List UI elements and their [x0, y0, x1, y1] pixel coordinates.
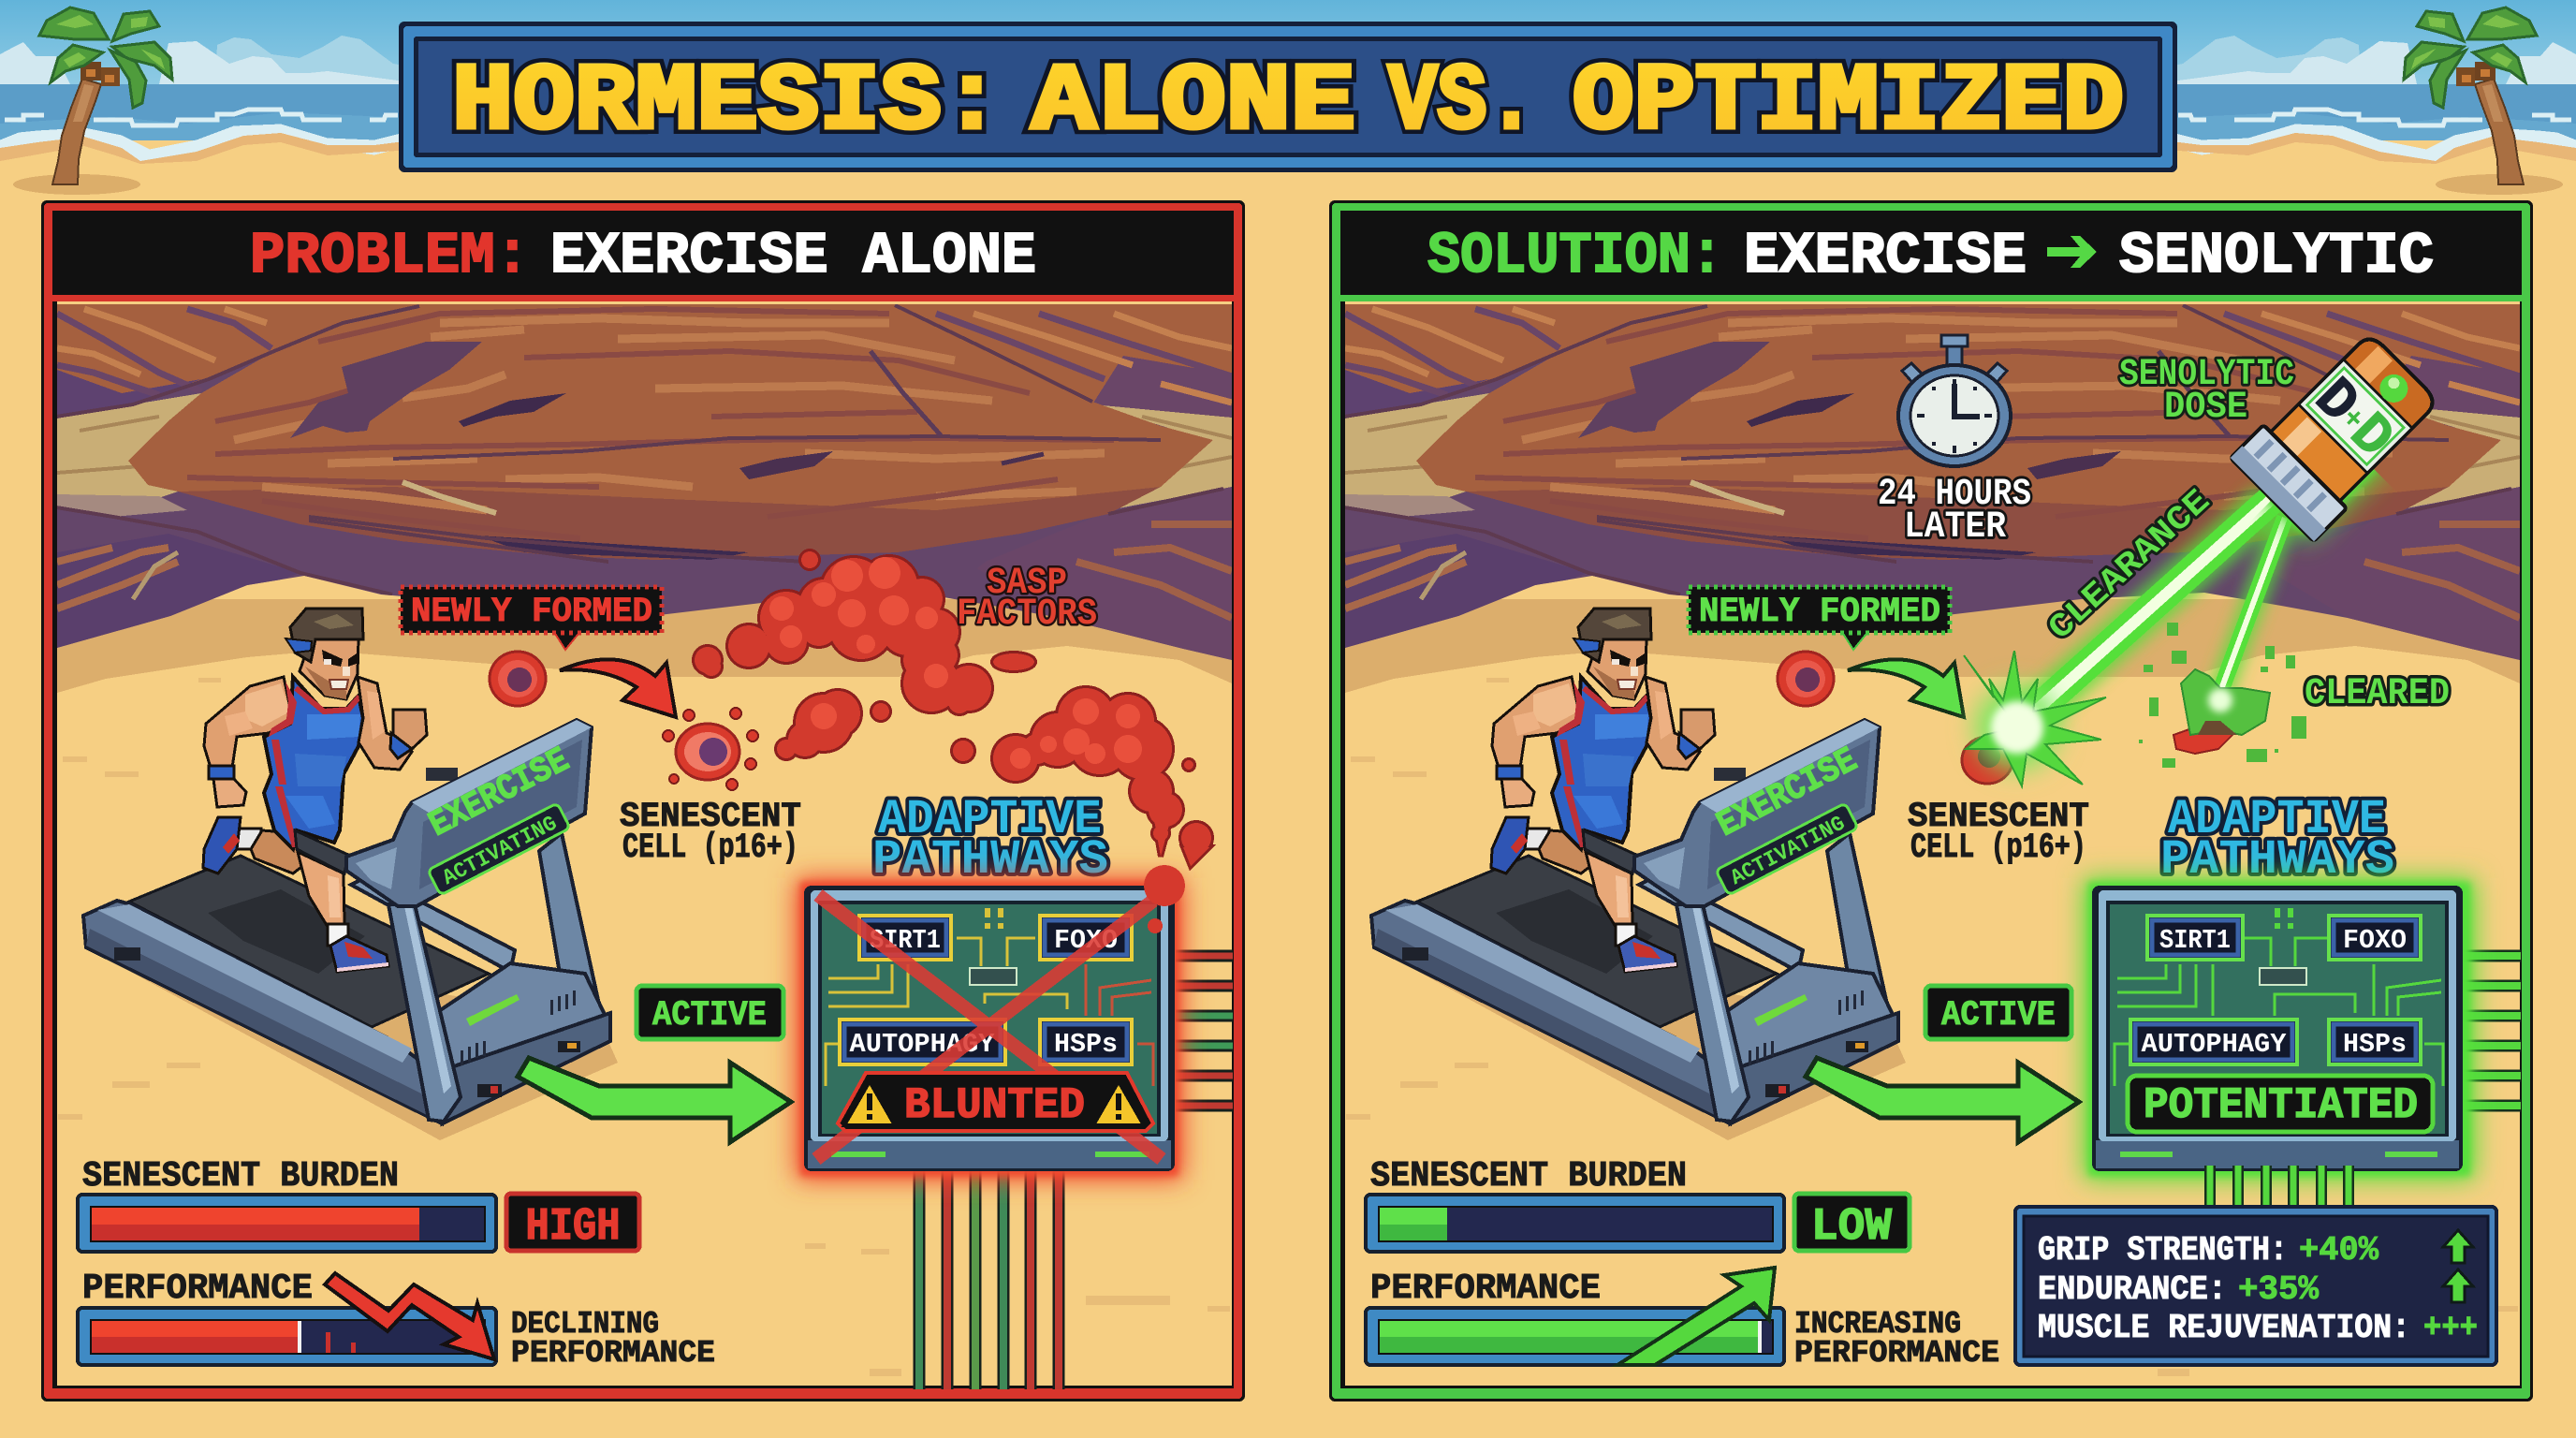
- callout: newly formed: [1689, 587, 1950, 650]
- label: adaptive pathways: [2160, 792, 2394, 888]
- panel frame: [41, 200, 1245, 1401]
- label: clearance: CLEARANCE: [2042, 482, 2217, 648]
- icon: senescent cell: [663, 708, 758, 790]
- pathways chip: blunted: [796, 865, 1185, 1180]
- badge: high: [506, 1194, 639, 1253]
- panel header: EXERCISE: [1744, 223, 2027, 289]
- treadmill console: ACTIVATING: [1726, 811, 1849, 890]
- label: 24 hours later: [1878, 474, 2031, 549]
- treadmill console: EXERCISE: [423, 741, 576, 846]
- title text: OPTIMIZED: [1573, 51, 2124, 156]
- red cross: [816, 895, 1162, 1159]
- pathway: HSPs: HSPs: [2343, 1029, 2407, 1060]
- badge: active: [637, 986, 783, 1039]
- palm tree left: [13, 7, 172, 195]
- pathways chip: potentiated: [2084, 878, 2475, 1210]
- label: adaptive pathways: PATHWAYS: [2160, 832, 2394, 888]
- title text: [452, 51, 2124, 156]
- burst: clearance hit: [1964, 651, 2106, 786]
- callout: newly formed: NEWLY FORMED: [411, 593, 652, 632]
- treadmill console: [1583, 720, 1880, 1122]
- arrow: increasing performance: [1617, 1268, 1775, 1365]
- badge: active: [1925, 986, 2071, 1039]
- title banner: [399, 22, 2177, 172]
- label: declining performance: PERFORMANCE: [511, 1336, 715, 1371]
- pathway: HSPs: HSPs: [1054, 1029, 1118, 1060]
- label: senescent cell: CELL (p16+): [1910, 829, 2086, 868]
- panel header: [1427, 223, 2434, 289]
- label: SASP factors: [957, 563, 1097, 636]
- panel: problem, exercise alone: [41, 200, 1245, 1401]
- pathway: SIRT1: [2147, 916, 2243, 960]
- pathway: SIRT1: SIRT1: [2159, 925, 2231, 956]
- title text: ALONE: [1032, 51, 1355, 156]
- badge: high: HIGH: [526, 1202, 620, 1253]
- pathway: HSPs: [1040, 1020, 1132, 1064]
- arrow: to senescent cell: [1848, 659, 1964, 717]
- arrow: activation to chip: [518, 1058, 791, 1142]
- SASP blob on chip: [1144, 865, 1185, 933]
- label: 24 hours later: 24 HOURS: [1878, 474, 2031, 516]
- pathway: SIRT1: [859, 916, 951, 960]
- meter: senescent burden: SENESCENT BURDEN: [82, 1156, 399, 1196]
- meter: performance: PERFORMANCE: [82, 1269, 313, 1309]
- treadmill: [83, 833, 618, 1140]
- title text: HORMESIS:: [452, 51, 1003, 156]
- treadmill console: [295, 720, 592, 1122]
- icon: senolytic bottle: D: [2335, 401, 2407, 472]
- panel header: PROBLEM:: [250, 223, 530, 289]
- icon: senescent cell under laser: [1962, 737, 2012, 784]
- pathway: HSPs: [2329, 1020, 2421, 1064]
- title text: VS.: [1388, 51, 1536, 156]
- icon: stopwatch: [1898, 335, 2011, 466]
- callout: newly formed: NEWLY FORMED: [1699, 593, 1940, 632]
- meter: performance: PERFORMANCE: [1370, 1269, 1601, 1309]
- treadmill: [1371, 833, 1906, 1140]
- result: grip strength: GRIP STRENGTH:: [2038, 1231, 2288, 1269]
- icon: up arrow: [2443, 1269, 2473, 1302]
- label: adaptive pathways: ADAPTIVE: [2168, 792, 2386, 847]
- callout: newly formed: [401, 587, 662, 650]
- label: declining performance: DECLINING: [511, 1307, 659, 1342]
- panel header: [250, 223, 1036, 289]
- meter: senescent burden: [78, 1156, 496, 1252]
- runner: [1491, 609, 1715, 972]
- label: adaptive pathways: PATHWAYS: [872, 832, 1108, 888]
- label: senescent cell: [1908, 798, 2089, 868]
- title text: VS.: [1388, 51, 1536, 156]
- palm tree right: [2404, 7, 2563, 195]
- blunted banner: [838, 1073, 1153, 1131]
- label: senescent cell: [620, 798, 801, 868]
- meter: senescent burden: SENESCENT BURDEN: [1370, 1156, 1687, 1196]
- badge: active: ACTIVE: [1941, 996, 2056, 1035]
- panel: solution, exercise then senolytic: [1329, 200, 2533, 1401]
- title text: OPTIMIZED: [1573, 51, 2124, 156]
- label: SASP factors: SASP: [987, 563, 1067, 605]
- pathway: FOXO: FOXO: [1054, 925, 1118, 956]
- treadmill console: EXERCISE: [1711, 741, 1864, 846]
- result: endurance: +35%: [2238, 1270, 2319, 1309]
- wires: right side: [2464, 956, 2521, 1106]
- label: increasing performance: INCREASING: [1794, 1307, 1961, 1342]
- wires: right side: [1176, 956, 1233, 1106]
- pathway: FOXO: FOXO: [2343, 925, 2407, 956]
- panel frame: [1329, 200, 2533, 1401]
- cleared debris: [2139, 623, 2306, 768]
- runner: [203, 609, 427, 972]
- pathway: autophagy: AUTOPHAGY: [2142, 1029, 2287, 1060]
- panel header: SENOLYTIC: [2119, 223, 2434, 289]
- result: endurance: ENDURANCE:: [2038, 1270, 2227, 1309]
- result: grip strength: +40%: [2299, 1231, 2378, 1269]
- pathway: autophagy: [840, 1020, 1005, 1064]
- badge: low: LOW: [1811, 1202, 1892, 1253]
- title text: HORMESIS:: [452, 51, 1003, 156]
- label: cleared: CLEARED: [2305, 673, 2450, 715]
- treadmill console: ACTIVATING: [438, 811, 561, 890]
- result: muscle rejuvenation: MUSCLE REJUVENATION:: [2038, 1309, 2410, 1347]
- label: increasing performance: PERFORMANCE: [1794, 1336, 1999, 1371]
- label: SASP factors: FACTORS: [957, 594, 1097, 636]
- label: senescent cell: SENESCENT: [620, 798, 801, 837]
- arrow: to senescent cell: [560, 659, 676, 717]
- meter: performance: [1366, 1269, 1784, 1365]
- results box: [2015, 1207, 2496, 1365]
- label: adaptive pathways: [872, 792, 1108, 888]
- meter: performance: [78, 1269, 496, 1365]
- pathway: SIRT1: SIRT1: [870, 925, 941, 956]
- badge: low: [1794, 1194, 1910, 1253]
- label: increasing performance: [1794, 1307, 1999, 1371]
- label: senolytic dose: SENOLYTIC: [2119, 354, 2294, 396]
- SASP factor clouds: [695, 551, 1211, 866]
- pathway: autophagy: [2130, 1020, 2297, 1064]
- wires: bottom: [919, 1170, 1059, 1389]
- muscle illustration: [56, 304, 1232, 1376]
- muscle illustration: [1344, 304, 2520, 1376]
- arrow: activation to chip: [1806, 1058, 2079, 1142]
- pathway: autophagy: AUTOPHAGY: [850, 1029, 995, 1060]
- meter: senescent burden: [1366, 1156, 1784, 1252]
- label: senescent cell: CELL (p16+): [622, 829, 798, 868]
- icon: senolytic bottle: D: [2301, 366, 2371, 437]
- badge: active: ACTIVE: [652, 996, 767, 1035]
- arrow: declining performance: [325, 1273, 494, 1359]
- label: senescent cell: SENESCENT: [1908, 798, 2089, 837]
- pathway: FOXO: [1040, 916, 1132, 960]
- laser beams: [2017, 501, 2285, 727]
- icon: up arrow: [2443, 1230, 2473, 1263]
- blunted banner: BLUNTED: [904, 1081, 1085, 1130]
- label: senolytic dose: DOSE: [2164, 387, 2247, 429]
- label: adaptive pathways: ADAPTIVE: [878, 792, 1102, 847]
- panel header: SOLUTION:: [1427, 223, 1723, 289]
- icon: senolytic bottle: [2225, 320, 2452, 547]
- icon: senolytic bottle: +: [2333, 402, 2370, 439]
- icon: newly formed cell: [1778, 652, 1834, 706]
- label: 24 hours later: LATER: [1904, 506, 2006, 549]
- potentiated banner: POTENTIATED: [2144, 1081, 2418, 1130]
- panel header: EXERCISE ALONE: [550, 223, 1036, 289]
- label: senolytic dose: [2119, 354, 2294, 429]
- title text: ALONE: [1032, 51, 1355, 156]
- result: muscle rejuvenation: +++: [2423, 1309, 2478, 1347]
- pathway: FOXO: [2329, 916, 2421, 960]
- label: declining performance: [511, 1307, 715, 1371]
- icon: newly formed cell: [490, 652, 546, 706]
